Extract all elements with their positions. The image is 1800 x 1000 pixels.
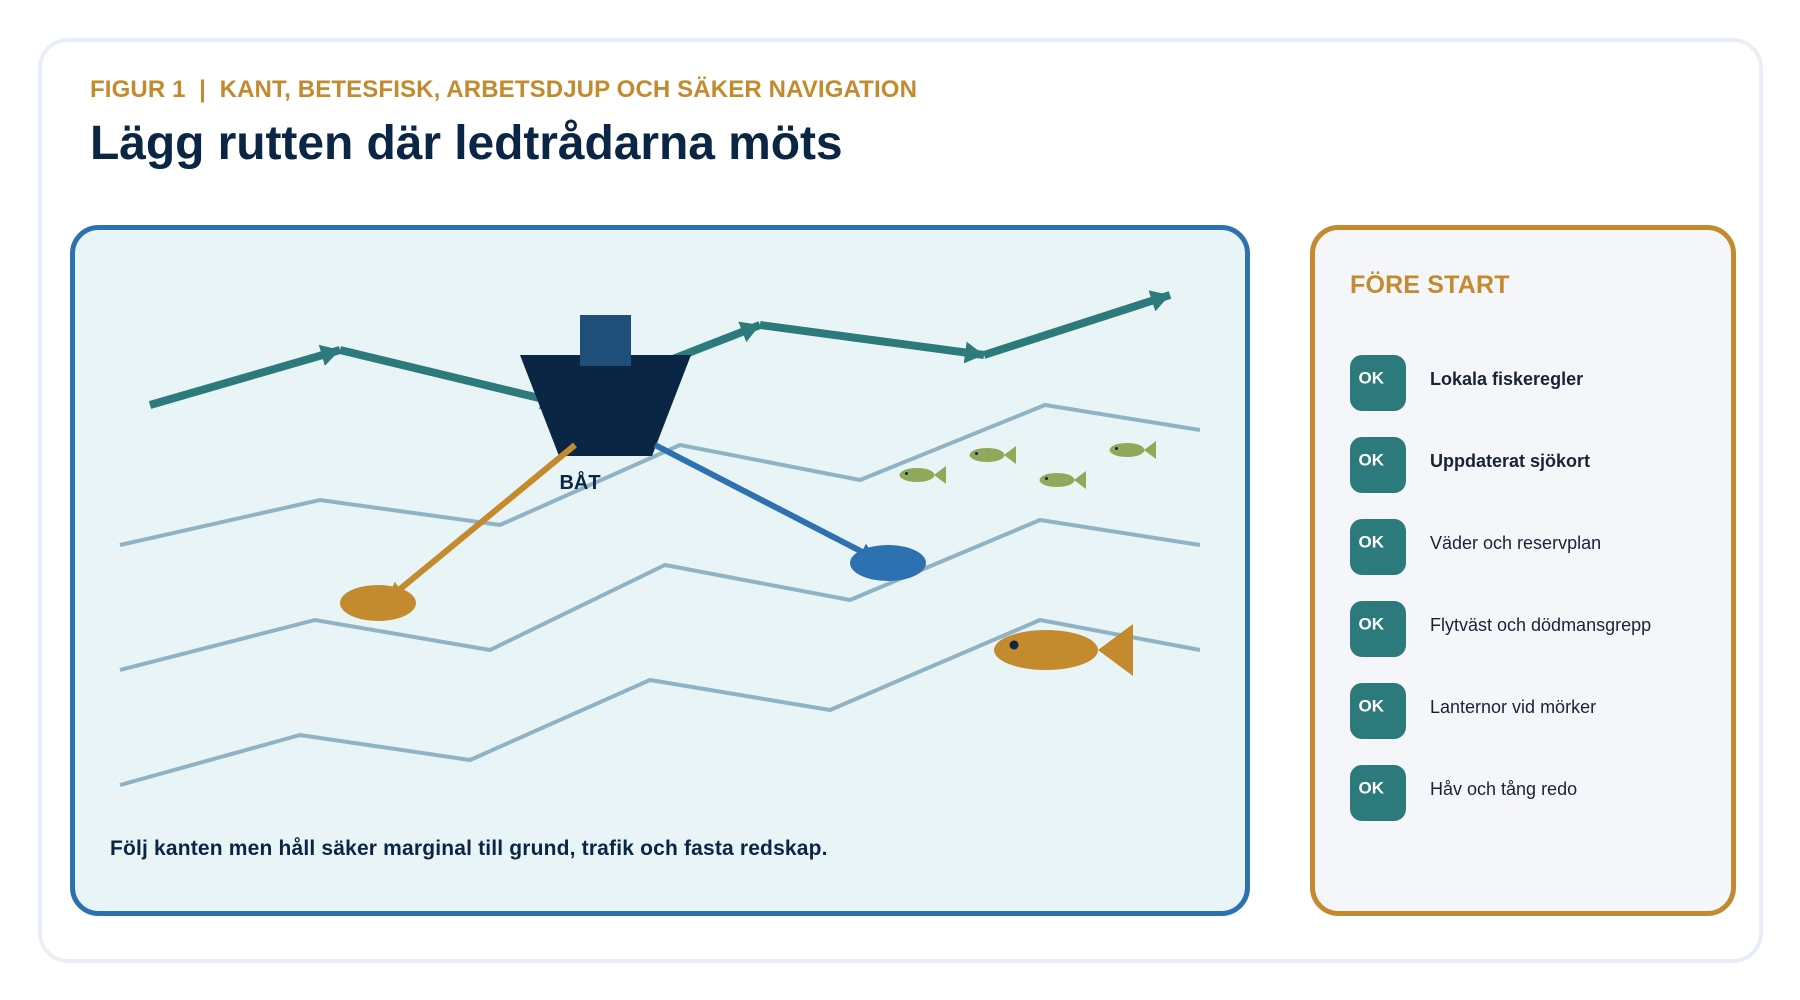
boat hull — [520, 355, 691, 456]
arrow: blue to working depth — [655, 445, 876, 559]
check item: net: Håv och tång redo — [1430, 779, 1577, 799]
checklist background — [1312, 228, 1734, 914]
boat — [520, 315, 691, 456]
check item: net — [1350, 765, 1577, 821]
check item: life vest: Flytväst och dödmansgrepp — [1430, 615, 1651, 635]
check item: local rules — [1350, 355, 1583, 411]
panel: sea chart — [72, 228, 1248, 914]
check item: lights: OK — [1358, 696, 1385, 716]
check item: life vest: OK — [1358, 614, 1385, 634]
check item: lights — [1350, 683, 1596, 739]
icon: bait fish 1 — [900, 466, 946, 484]
icon: bait fish 3 — [1040, 471, 1086, 489]
marker: blue spot — [850, 545, 926, 581]
check item: chart — [1350, 437, 1590, 493]
check item: local rules: OK — [1358, 368, 1385, 388]
check item: net: OK — [1358, 778, 1385, 798]
eyebrow heading: FIGUR 1 | KANT, BETESFISK, ARBETSDJUP OCH SÄKER NAVIGATION — [90, 76, 917, 103]
check item: life vest — [1350, 601, 1651, 657]
icon: large fish — [994, 624, 1133, 676]
check item: weather: Väder och reservplan — [1430, 533, 1601, 553]
panel: checklist — [1312, 228, 1734, 914]
checklist heading: FÖRE START — [1350, 270, 1510, 299]
depth contours — [120, 405, 1200, 785]
chart caption: Följ kanten men håll säker marginal till grund, trafik och fasta redskap. — [110, 837, 828, 860]
check item: lights: Lanternor vid mörker — [1430, 697, 1596, 717]
check item: weather — [1350, 519, 1601, 575]
check item: weather: OK — [1358, 532, 1385, 552]
check item: local rules: Lokala fiskeregler — [1430, 369, 1583, 389]
icon: bait fish 2 — [970, 446, 1016, 464]
marker: orange spot — [340, 585, 416, 621]
panel background — [72, 228, 1248, 914]
arrow: orange to bait — [388, 445, 575, 599]
check item: chart: Uppdaterat sjökort — [1430, 451, 1590, 471]
check item: chart: OK — [1358, 450, 1385, 470]
icon: bait fish 4 — [1110, 441, 1156, 459]
boat label: BÅT — [559, 470, 601, 494]
boat cabin — [580, 315, 631, 366]
boat route — [150, 295, 1170, 405]
title: Lägg rutten där ledtrådarna möts — [90, 117, 843, 170]
